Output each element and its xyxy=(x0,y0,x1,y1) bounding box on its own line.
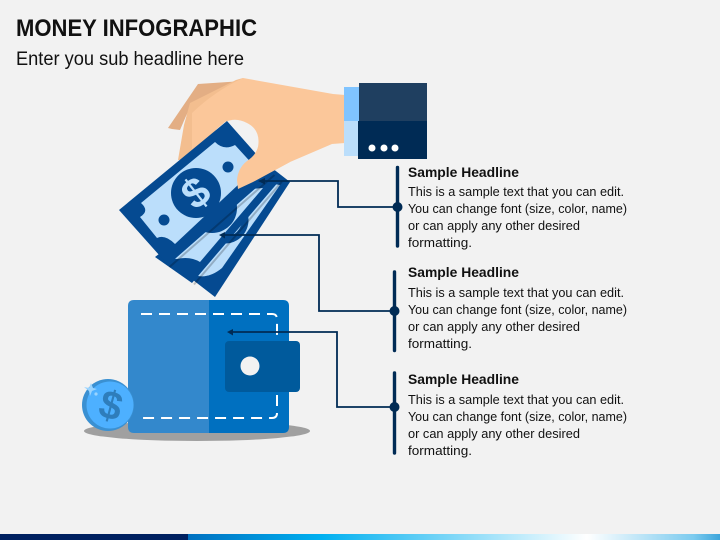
icon: banknotes xyxy=(119,121,290,297)
subtitle: Enter you sub headline here xyxy=(16,49,244,70)
text block 2: This is a sample text that you can edit. xyxy=(408,285,624,300)
icon: coin: $ xyxy=(94,382,127,430)
front bill: $ xyxy=(172,167,219,218)
text block 1: This is a sample text that you can edit. xyxy=(408,184,624,199)
wallet stitching xyxy=(140,314,277,418)
wallet body xyxy=(128,300,209,433)
text block 1: or can apply any other desired xyxy=(408,218,580,233)
connector 2 xyxy=(219,232,394,311)
text block 3: This is a sample text that you can edit. xyxy=(408,392,624,407)
back finger xyxy=(168,81,243,130)
text block 2: Sample Headline xyxy=(408,264,519,280)
text block 3 xyxy=(390,371,627,458)
text block 1: Sample Headline xyxy=(408,164,519,180)
icon: sleeve cuff xyxy=(344,83,427,159)
wallet clasp xyxy=(225,341,300,392)
text block 2: or can apply any other desired xyxy=(408,319,580,334)
text block 2: You can change font (size, color, name) xyxy=(408,302,627,317)
thumb over bill xyxy=(237,140,290,189)
connector 1 xyxy=(258,178,397,207)
front bill xyxy=(119,121,274,267)
text block 1: You can change font (size, color, name) xyxy=(408,201,627,216)
text block 3: formatting. xyxy=(408,443,472,458)
bottom colour bar xyxy=(0,534,720,540)
text block 1 xyxy=(392,164,627,250)
icon: wallet xyxy=(84,300,310,441)
middle bill xyxy=(155,176,282,284)
icon: hand holding money xyxy=(168,78,345,189)
text block 2: formatting. xyxy=(408,336,472,351)
wallet shadow xyxy=(84,421,310,441)
back bill xyxy=(193,168,290,297)
text block 3: or can apply any other desired xyxy=(408,426,580,441)
icon: coin xyxy=(82,379,134,431)
text block 2 xyxy=(390,264,627,351)
connector 3 xyxy=(227,329,394,407)
palm and thumb xyxy=(192,78,345,189)
title: MONEY INFOGRAPHIC xyxy=(16,15,257,42)
text block 1: formatting. xyxy=(408,235,472,250)
text block 3: You can change font (size, color, name) xyxy=(408,409,627,424)
text block 3: Sample Headline xyxy=(408,371,519,387)
